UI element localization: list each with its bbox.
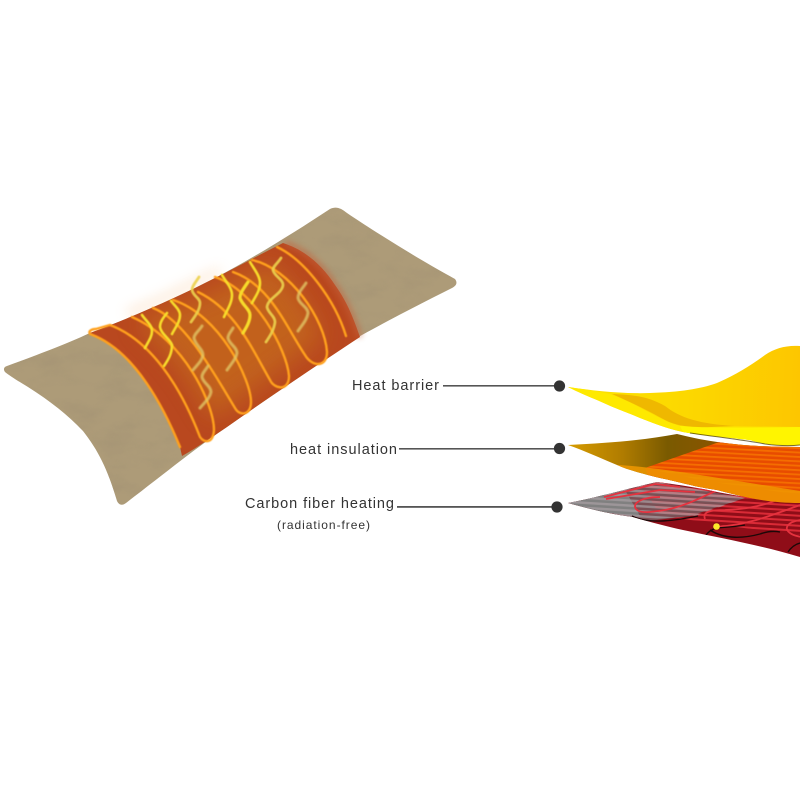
heating coil bbox=[89, 247, 346, 447]
amber lower rim bbox=[617, 465, 800, 503]
label: heat insulation bbox=[290, 442, 565, 458]
red wire bbox=[604, 484, 800, 537]
heat glow above pillow bbox=[125, 268, 225, 318]
pillow bbox=[4, 208, 456, 505]
heated zone bbox=[90, 243, 360, 456]
grey left section bbox=[568, 482, 745, 522]
marker dot: heat insulation bbox=[554, 443, 565, 454]
gold fold shading bbox=[612, 394, 735, 427]
label: Heat barrier: Heat barrier bbox=[352, 378, 439, 394]
soft right edge of heated zone bbox=[285, 243, 360, 337]
label: Carbon fiber heating: Carbon fiber heating bbox=[245, 496, 394, 512]
orange centre tone bbox=[135, 262, 322, 420]
layer: carbon fiber heating sheet bbox=[568, 482, 800, 557]
layer: heat barrier sheet bbox=[568, 346, 800, 446]
pillow body bbox=[4, 208, 456, 505]
label: Carbon fiber heating bbox=[245, 496, 563, 532]
orange striped base bbox=[645, 440, 800, 505]
label: Heat barrier bbox=[352, 378, 565, 394]
layer: heat insulation sheet bbox=[568, 434, 800, 505]
bright lower strip bbox=[568, 387, 800, 445]
marker dot: heat barrier bbox=[554, 380, 565, 392]
sub-label: radiation-free: (radiation-free) bbox=[277, 518, 370, 532]
label: heat insulation: heat insulation bbox=[290, 442, 397, 458]
black wire bbox=[632, 516, 800, 552]
dark under-edge bbox=[690, 433, 800, 446]
red stripes bbox=[640, 482, 800, 535]
stripe lines bbox=[646, 443, 800, 489]
grey stripes bbox=[568, 482, 745, 520]
marker dot: carbon fiber bbox=[551, 501, 563, 513]
yellow connector point bbox=[713, 523, 720, 530]
rising heat waves bbox=[142, 258, 308, 408]
